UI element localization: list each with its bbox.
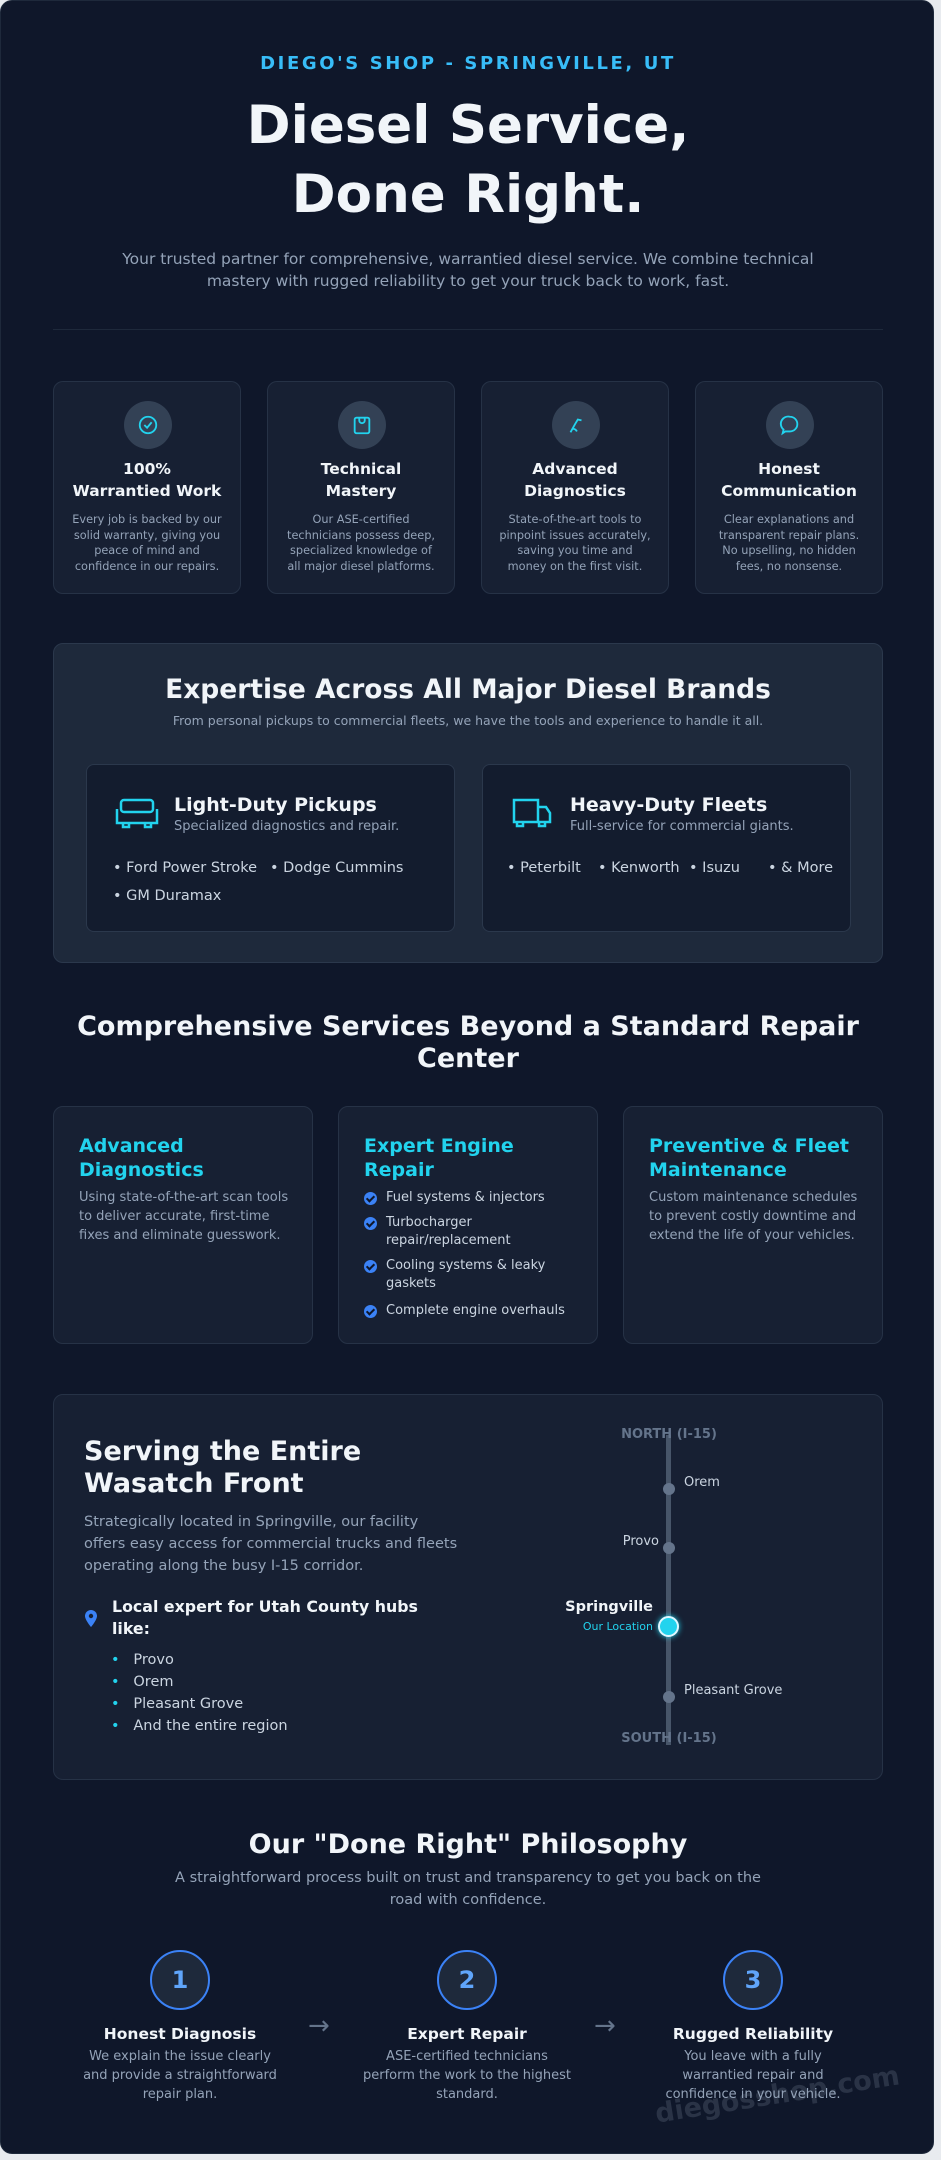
- card: mastery: technicians possess deep,: [287, 529, 435, 542]
- corridor map: SOUTH (I-15): [621, 1731, 717, 1746]
- service: preventive: Maintenance: [649, 1159, 787, 1181]
- corridor map: Orem: [684, 1475, 720, 1490]
- card: mastery: Our ASE-certified: [312, 513, 410, 526]
- service: preventive: Custom maintenance schedules to prevent costly downtime and extend the life of your vehicles.: [649, 1190, 857, 1243]
- card: diagnostics: saving you time and: [517, 544, 633, 557]
- brands subtitle: From personal pickups to commercial fleets, we have the tools and experience to handle it all.: [173, 713, 763, 728]
- card: heavy duty: • Isuzu: [689, 860, 740, 876]
- service cards: [53, 1106, 883, 1344]
- card: warranty: Every job is backed by our: [72, 513, 222, 526]
- location heading: Serving the Entire: [84, 1436, 361, 1467]
- hubs list: • And the entire region: [111, 1718, 288, 1734]
- card: mastery: all major diesel platforms.: [287, 560, 435, 573]
- philosophy subtitle: A straightforward process built on trust and transparency to get you back on the road with confidence.: [175, 1870, 761, 1908]
- step 1: 1: [172, 1966, 188, 1994]
- service: engine repair: Repair: [364, 1159, 434, 1181]
- brands heading: Expertise Across All Major Diesel Brands: [165, 674, 771, 705]
- service: preventive: [623, 1106, 883, 1344]
- step 1: Honest Diagnosis: [104, 2025, 256, 2043]
- location heading: [84, 1436, 361, 1499]
- service: diagnostics: [53, 1106, 313, 1344]
- service: engine repair: Cooling systems & leaky: [386, 1258, 545, 1273]
- card: mastery: specialized knowledge of: [290, 544, 432, 557]
- card: diagnostics: pinpoint issues accurately,: [499, 529, 651, 542]
- step 2: ASE-certified technicians: [386, 2049, 548, 2064]
- step 3: 3: [745, 1966, 761, 1994]
- location text: [84, 1514, 457, 1574]
- card: communication: No upselling, no hidden: [722, 544, 856, 557]
- service: engine repair: gaskets: [386, 1276, 436, 1291]
- card: communication: transparent repair plans.: [719, 529, 859, 542]
- watermark: diegosshop.com: [653, 2060, 902, 2130]
- philosophy heading: Our "Done Right" Philosophy: [249, 1829, 687, 1860]
- service: diagnostics: Using state-of-the-art scan tools to deliver accurate, first-time fixes and eliminate guesswork.: [79, 1190, 288, 1243]
- card: communication: fees, no nonsense.: [736, 560, 842, 573]
- card: diagnostics: Diagnostics: [524, 482, 626, 500]
- step 2: Expert Repair: [407, 2025, 527, 2043]
- card: diagnostics: State-of-the-art tools to: [509, 513, 641, 526]
- arrow 2: →: [594, 2011, 616, 2041]
- step 3: You leave with a fully: [684, 2049, 822, 2064]
- card: light duty: • GM Duramax: [113, 888, 221, 904]
- card: heavy duty: • & More: [768, 860, 833, 876]
- subtitle: Your trusted partner for comprehensive, warrantied diesel service. We combine technical: [122, 250, 814, 268]
- card: warranty: solid warranty, giving you: [74, 529, 220, 542]
- card: warranty: peace of mind and: [94, 544, 200, 557]
- title: Done Right.: [292, 164, 644, 225]
- card: communication: [695, 381, 883, 594]
- service: diagnostics: Advanced: [79, 1135, 184, 1157]
- step 2: 2: [459, 1966, 475, 1994]
- hubs list: • Orem: [111, 1674, 174, 1690]
- card: heavy duty: Heavy-Duty Fleets: [570, 794, 767, 816]
- card: warranty: Warrantied Work: [73, 482, 221, 500]
- feature cards: [53, 381, 883, 594]
- service: engine repair: Complete engine overhauls: [386, 1303, 565, 1318]
- corridor map: Provo: [623, 1534, 659, 1549]
- card: heavy duty: • Kenworth: [598, 860, 680, 876]
- card: heavy duty: [482, 764, 851, 932]
- step 2: standard.: [436, 2087, 498, 2102]
- service: engine repair: repair/replacement: [386, 1233, 511, 1248]
- hubs list: • Pleasant Grove: [111, 1696, 243, 1712]
- card: warranty: 100%: [123, 460, 171, 478]
- card: light duty: [86, 764, 455, 932]
- subtitle: mastery with rugged reliability to get your truck back to work, fast.: [207, 272, 729, 290]
- service: preventive: Preventive & Fleet: [649, 1135, 849, 1157]
- step 3: [665, 1950, 841, 2102]
- card: mastery: Mastery: [326, 482, 396, 500]
- step 2: [363, 1950, 571, 2102]
- card: diagnostics: money on the first visit.: [508, 560, 642, 573]
- card: light duty: Light-Duty Pickups: [174, 794, 377, 816]
- title: Diesel Service,: [247, 95, 689, 156]
- location heading: Wasatch Front: [84, 1468, 304, 1499]
- location text: Strategically located in Springville, our facility: [84, 1514, 418, 1530]
- card: diagnostics: Advanced: [532, 460, 618, 478]
- corridor map: [565, 1427, 782, 1746]
- card: mastery: Technical: [321, 460, 401, 478]
- service: diagnostics: Diagnostics: [79, 1159, 204, 1181]
- tagline: DIEGO'S SHOP - SPRINGVILLE, UT: [260, 53, 676, 74]
- service: engine repair: [338, 1106, 598, 1344]
- location text: offers easy access for commercial trucks and fleets: [84, 1536, 457, 1552]
- hubs list: • Provo: [111, 1652, 174, 1668]
- card: heavy duty: • Peterbilt: [507, 860, 581, 876]
- step 3: confidence in your vehicle.: [665, 2087, 841, 2102]
- hubs list: [85, 1597, 418, 1734]
- card: warranty: [53, 381, 241, 594]
- card: light duty: • Ford Power Stroke: [113, 860, 257, 876]
- step 1: [83, 1950, 277, 2102]
- services heading: Comprehensive Services Beyond a Standard Repair Center: [77, 1011, 859, 1074]
- step 2: perform the work to the highest: [363, 2068, 571, 2083]
- card: communication: Communication: [721, 482, 857, 500]
- card: light duty: • Dodge Cummins: [270, 860, 403, 876]
- location text: operating along the busy I-15 corridor.: [84, 1558, 363, 1574]
- panel: brands: [53, 643, 883, 963]
- card: mastery: [267, 381, 455, 594]
- card: light duty: Specialized diagnostics and repair.: [174, 819, 399, 834]
- corridor map: NORTH (I-15): [621, 1427, 717, 1442]
- hubs list: Local expert for Utah County hubs like:: [112, 1597, 418, 1638]
- service: engine repair: Fuel systems & injectors: [386, 1190, 545, 1205]
- card: communication: Clear explanations and: [724, 513, 854, 526]
- service: engine repair: Expert Engine: [364, 1135, 514, 1157]
- card: warranty: confidence in our repairs.: [75, 560, 219, 573]
- card: diagnostics: [481, 381, 669, 594]
- panel: location: [53, 1394, 883, 1780]
- card: communication: Honest: [758, 460, 820, 478]
- subtitle: [122, 250, 814, 290]
- corridor map: Our Location: [583, 1620, 653, 1633]
- corridor map: Springville: [565, 1599, 653, 1615]
- step 3: Rugged Reliability: [673, 2025, 833, 2043]
- step 1: We explain the issue clearly and provide a straightforward repair plan.: [83, 2049, 277, 2102]
- arrow 1: →: [308, 2011, 330, 2041]
- card: heavy duty: Full-service for commercial giants.: [570, 819, 794, 834]
- service: engine repair: Turbocharger: [386, 1215, 472, 1230]
- step 3: warrantied repair and: [682, 2068, 824, 2083]
- title: [247, 95, 689, 225]
- corridor map: Pleasant Grove: [684, 1683, 782, 1698]
